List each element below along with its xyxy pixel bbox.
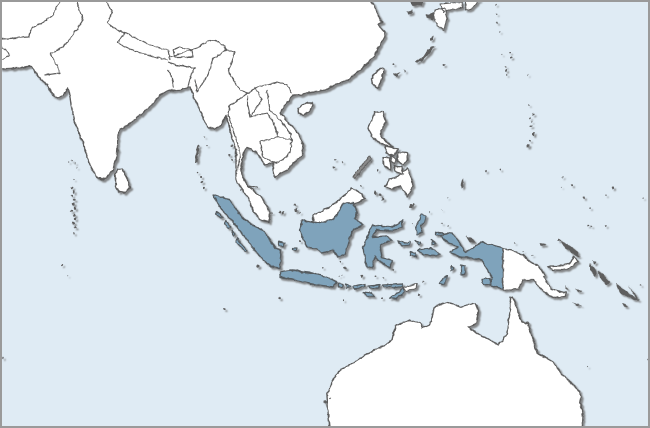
East Timor: [403, 284, 417, 291]
Taiwan: [371, 68, 384, 88]
Frederik Hendrik island: [482, 278, 491, 285]
Japan and Korea: [407, 0, 482, 41]
Papua New Guinea: [503, 248, 566, 298]
Australia: [327, 298, 583, 428]
Sri Lanka: [115, 169, 130, 193]
Hainan: [298, 103, 313, 115]
Pacific island chains: [509, 52, 511, 54]
New Britain: [548, 257, 578, 270]
Indonesia: Lesser Sunda and smaller islands: [216, 212, 465, 299]
Indonesia: Sulawesi: [363, 220, 403, 268]
mainland Asia: [0, 0, 385, 222]
Indonesia: Kalimantan: [300, 203, 363, 257]
Indonesia: Java: [280, 270, 337, 287]
Indonesia: Papua: [440, 233, 503, 289]
Andaman, Nicobar, Lakshadweep and Maldives: [195, 145, 200, 163]
Indonesia: Sumatra: [213, 195, 281, 268]
Ryukyu islands: [393, 46, 435, 76]
Melanesian islands: [539, 238, 640, 307]
Philippines: [353, 112, 413, 197]
Malaysian Borneo: [302, 188, 365, 223]
